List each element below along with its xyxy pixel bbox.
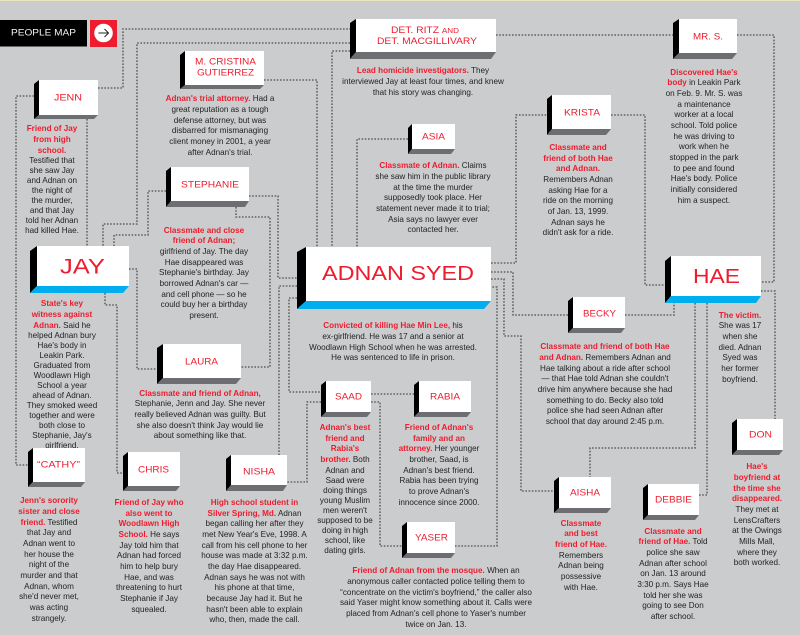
description: Mr. S.: body in Leakin Park [667,78,741,87]
description: Jenn: school. [38,146,66,155]
description: M. Cristina Gutierrez: defense attorney, but was [174,116,266,125]
description: Nisha: began calling her after they [205,519,304,528]
description: Yaser: Friend of Adnan from the mosque. When an [352,566,520,575]
name box: Mr. S.: MR. S. [693,32,723,42]
name box: Yaser [402,522,455,558]
description: Mr. S.: he was driving to [674,132,734,141]
description: Chris: Stephanie if Jay [120,594,178,603]
description: Chris: Friend of Jay who [114,498,184,507]
description: Nisha: hasn't been able to explain [206,605,303,614]
description: Rabia: to prove Adnan's [409,487,469,496]
description: Mr. S.: a maintenance [677,100,731,109]
description: Laura: she also doesn't think Jay would lie [137,421,263,430]
description: Mr. S.: worker at a local [674,110,734,119]
description: Stephanie: girlfriend of Jay. The day [160,247,248,256]
description: Saad: Saad were [326,476,364,485]
description: Asia: supposedly took place. Her [384,193,482,202]
description: Chris: also went to [126,509,172,518]
description: Krista: friend of both Hae [543,154,613,163]
description: Krista: Adnan says he [551,218,605,227]
description: Krista: and Adnan. [556,164,600,173]
description: Laura: really believed Adnan was guilty. But [134,410,266,419]
description: Hae: The victim. [719,311,761,320]
description: Don: Mills Mall, [739,537,775,546]
description: Hae: her former [721,364,759,373]
name box: Don: DON [749,430,772,440]
description: Don [732,462,782,567]
description: detectives: that his story was changing. [373,88,473,97]
description: Mr. S.: school. Told police [671,121,737,130]
description: Adnan Syed: Woodlawn High School when he was arrested. [309,343,477,352]
description: Saad: supposed to be [317,516,373,525]
name box: Yaser: YASER [415,532,448,544]
description: Rabia: brother, Saad, is [409,455,469,464]
description: Jay: Leakin Park. [39,351,85,360]
name box: Krista [547,95,611,135]
description: Saad: Adnan's best [320,423,370,432]
name box: Cathy [28,448,85,487]
description: Rabia: attorney. Her younger [399,444,479,453]
description: Rabia: innocence since 2000. [399,498,479,507]
description: Saad: dating girls. [324,546,366,555]
description: M. Cristina Gutierrez: disbarred for mismanaging [172,126,268,135]
name box: Adnan Syed [297,247,491,309]
description: Mr. S.: Discovered Hae's [670,68,738,77]
description: Jenn: the murder, [31,196,73,205]
description: Hae: She was 17 [719,321,761,330]
description: Jay: Graduated from [34,361,90,370]
description: M. Cristina Gutierrez: client money in 2001, a year [169,137,271,146]
description: Asia: Asia says no lawyer ever [388,215,478,224]
description: Becky: something to do. Becky also told [547,396,663,405]
description: Chris: Woodlawn High [119,519,179,528]
description: Aisha [555,519,607,592]
top edge strip [0,0,800,1]
description: Don: disappeared. [732,494,782,503]
description: Asia [375,161,491,234]
name box: Asia: ASIA [422,132,446,142]
description: Mr. S.: on Feb. 9. Mr. S. was [666,89,742,98]
name box: Laura [157,344,241,384]
description: Jay: helped Adnan bury [28,331,96,340]
description: Laura [134,389,266,440]
description: Jay: State's key [41,299,83,308]
description: Krista: ride on the morning [543,196,613,205]
description: Nisha: met New Year's Eve, 1998. A [202,530,307,539]
name box: Cathy: “CATHY” [37,460,80,470]
description: M. Cristina Gutierrez: after Adnan's trial. [188,148,252,157]
description: Stephanie: present. [189,311,219,320]
description: Saad: friend and [325,434,365,443]
description: Chris [114,498,184,615]
description: Jay: Woodlawn High [34,371,90,380]
description: Laura: about something like that. [154,431,246,440]
description: Debbie: after school. [651,612,695,621]
name box: Jay [30,246,129,293]
description: Jay: both close to [39,421,85,430]
description: Nisha: house was made at 3:32 p.m. [201,551,308,560]
description: Yaser: “concentrate on the victim's boyfriend,” the caller also [340,588,532,597]
description: Cathy: murder and that [20,571,78,580]
description: Jay: School a year [37,381,87,390]
description: Krista: didn't ask for a ride. [543,228,613,237]
description: Yaser: said Yaser might know something about it. Calls were [340,598,532,607]
description: Aisha: and best [564,529,598,538]
description: Rabia [398,423,480,507]
description: Cathy: Adnan, whom [24,582,74,591]
description: Nisha [201,498,308,626]
description: Asia: at the time the murder [393,183,473,192]
name box: Hae: HAE [693,266,740,288]
description: Debbie: told her she was [643,591,703,600]
description: Saad: doing things [323,486,367,495]
name box: Saad [321,381,371,417]
description: Laura: Stephanie, Jenn and Jay. She never [135,399,265,408]
description: Jay: Adnan. Said he [33,321,91,330]
name box: Chris [123,452,180,491]
name box: Det. Ritz and Det. MacGillivary: DET. RITZ AND [391,25,460,36]
description: Adnan Syed [309,321,477,362]
name box: Nisha: NISHA [243,466,276,478]
name box: Nisha [226,455,287,491]
name box: Det. Ritz and Det. MacGillivary: DET. MACGILLIVARY [377,36,478,47]
description: Debbie: police she saw [646,548,700,557]
description: Nisha: High school student in [211,498,298,507]
description: Saad: doing in high [322,526,368,535]
description: Debbie [637,527,709,621]
description: Jenn: and that Jay [30,206,74,215]
name box: M. Cristina Gutierrez: GUTIERREZ [197,68,254,78]
description: Nisha: because Jay had it. But he [207,594,302,603]
description: Chris: him to help bury [120,562,178,571]
name box: Stephanie: STEPHANIE [181,180,239,190]
description: Cathy: her house the [24,550,74,559]
name box: Becky: BECKY [583,308,617,320]
icon: arrow button [90,20,117,47]
description: Asia: Classmate of Adnan. Claims [379,161,487,170]
description: Saad: Adnan and [325,466,365,475]
description: Becky: police she had seen Adnan after [547,406,663,415]
name box: Mr. S. [673,19,737,59]
description: Nisha: the day Hae disappeared. [208,562,301,571]
name box: Aisha: AISHA [570,488,601,498]
description: M. Cristina Gutierrez [166,94,274,157]
name box: Chris: CHRIS [138,464,169,476]
description: Becky: school that day around 2:45 p.m. [546,417,664,426]
description: Krista: of Jan. 13, 1999. [548,207,608,216]
description: Stephanie: Hae disappeared was [165,258,243,267]
name box: Rabia: RABIA [430,392,461,402]
description: Nisha: Silver Spring, Md. Adnan [208,509,301,518]
description: Aisha: with Hae. [564,583,598,592]
description: Cathy: Jenn's sorority [20,496,78,505]
description: Mr. S. [666,68,742,205]
name box: M. Cristina Gutierrez: M. CRISTINA [195,56,257,68]
description: Rabia: Rabia has been trying [399,476,479,485]
description: Debbie: Adnan after school [639,559,707,568]
name box: Adnan Syed: ADNAN SYED [322,263,474,285]
name box: Debbie: DEBBIE [655,494,692,506]
description: Saad: young Muslim [320,496,370,505]
name box: Jenn: JENN [54,92,82,103]
description: Stephanie: borrowed Adnan's car — [160,279,248,288]
description: Jenn: she saw Jay [30,166,74,175]
description: Becky: Classmate and friend of both Hae [540,342,670,351]
name box: Don [732,419,783,455]
description: Asia: contacted her. [407,225,459,234]
description: Aisha: Remembers [559,551,603,560]
description: Hae: when she [723,332,757,341]
description: Don: the time she [733,484,781,493]
description: Becky: — that Hae told Adnan she couldn't [541,374,669,383]
name box: Jay: JAY [60,256,105,278]
description: Jay: girlfriend. [45,441,79,450]
description: Yaser [340,566,532,629]
description: Cathy: sister and close [18,507,80,516]
description: Mr. S.: to pee and found [674,164,734,173]
name box: M. Cristina Gutierrez [180,51,264,89]
description: Yaser: twice on Jan. 13. [406,620,466,629]
description: Jenn: had killed Hae. [25,226,79,235]
description: Jay: ahead of Adnan. [32,391,92,400]
description: Cathy: night of the [29,560,69,569]
name box: Stephanie [166,167,249,207]
description: detectives: interviewed Jay at least four times, and knew [342,77,504,86]
description: Mr. S.: him a suspect. [678,196,730,205]
description: Stephanie: could buy her a birthday [161,300,247,309]
description: Mr. S.: Hae's body. Police [671,174,737,183]
name box: Debbie [643,484,699,520]
description: Stephanie: and cell phone — so he [161,290,247,299]
description: Jay: Hae's body in [38,341,86,350]
description: Hae: Syed was [722,353,758,362]
description: Jenn: Testified that [29,156,75,165]
description: Don: They met at [736,505,778,514]
name box: Det. Ritz and Det. MacGillivary [350,19,496,59]
description: Nisha: his phone at that time, [215,583,294,592]
description: Adnan Syed: He was sentenced to life in prison. [331,353,455,362]
description: Debbie: going to see Don [642,601,704,610]
name box: Saad: SAAD [335,392,362,402]
description: Hae [718,311,761,384]
description: Stephanie: Stephanie's birthday. Jay [159,268,249,277]
description: Debbie: 3:30 p.m. Says Hae [637,580,709,589]
description: detectives [342,66,504,97]
description: Cathy: friend. Testified [21,518,77,527]
description: Chris: School. He says [119,530,179,539]
description: Jenn: and Adnan on [27,176,77,185]
description: Cathy: she'd never met, [19,592,79,601]
description: Cathy [18,496,80,623]
description: Hae: died. Adnan [719,343,761,352]
description: Becky: Hae talking about a ride after school [540,364,670,373]
description: Aisha: Adnan being [558,561,604,570]
description: Aisha: possessive [561,572,601,581]
description: Chris: threatening to hurt [116,583,182,592]
description: Saad: school, like [325,536,365,545]
description: Jenn: told her Adnan [26,216,78,225]
description: Chris: Adnan had forced [117,551,181,560]
description: Cathy: that Jay and [27,528,71,537]
description: Jay: Stephanie, Jay's [32,431,92,440]
description: Aisha: Classmate [561,519,601,528]
description: Krista: Classmate and [549,143,607,152]
description: Laura: Classmate and friend of Adnan, [139,389,261,398]
description: Stephanie: friend of Adnan; [173,236,235,245]
description: Saad: men weren't [323,506,367,515]
description: Cathy: Adnan went to [23,539,75,548]
name box: Aisha [554,477,611,513]
description: Rabia: Adnan's best friend. [403,466,475,475]
description: Asia: statement never made it to trial; [376,204,490,213]
description: M. Cristina Gutierrez: Adnan's trial attorney. Had a [166,94,274,103]
description: Jenn: Friend of Jay [27,124,77,133]
description: Saad: brother. Both [320,455,370,464]
banner: people map [0,20,87,46]
description: Don: boyfriend at [734,473,780,482]
name box: Jenn [34,80,98,119]
description: Nisha: who, then, made the call. [209,615,300,624]
description: Mr. S.: work when he [679,142,729,151]
description: Krista: asking Hae for a [548,186,608,195]
description: Debbie: on Jan. 13 around [640,569,706,578]
description: Becky: and Adnan. Remembers Adnan and [539,353,671,362]
description: Don: at the Owings [732,526,782,535]
description: Adnan Syed: Convicted of killing Hae Min Lee, his [323,321,463,330]
description: Don: LensCrafters [734,516,780,525]
description: Chris: squealed. [131,605,167,614]
description: Jay: together and were [29,411,95,420]
description: Yaser: anonymous caller contacted police telling them to [347,577,525,586]
description: Jay [26,299,97,450]
description: Debbie: friend of Hae. Told [639,537,707,546]
description: Mr. S.: initially considered [671,185,737,194]
description: Cathy: strangely. [32,614,66,623]
description: Hae: boyfriend. [722,375,758,384]
description: Don: both worked. [734,558,780,567]
name box: Becky [568,297,625,333]
description: Adnan Syed: ex-girlfriend. He was 17 and a senior at [322,332,464,341]
description: Stephanie [159,226,249,320]
description: Cathy: was acting [30,603,68,612]
description: Mr. S.: stopped in the park [669,153,739,162]
description: Jay: They smoked weed [27,401,97,410]
description: detectives: Lead homicide investigators. They [357,66,489,75]
description: Jay: witness against [32,310,92,319]
description: Saad [317,423,373,555]
description: Yaser: placed from Adnan's cell phone to Yaser's number [346,609,526,618]
description: Saad: Rabia's [331,444,359,453]
description: Nisha: call from his cell phone to her [202,541,307,550]
name box: Hae [665,256,761,303]
description: Asia: she saw him in the public library [375,172,491,181]
name box: Krista: KRISTA [564,108,601,118]
description: Rabia: Friend of Adnan's [405,423,473,432]
description: Debbie: Classmate and [644,527,702,536]
banner: people map: PEOPLE MAP [11,28,76,38]
description: Chris: Jay told him that [119,541,179,550]
name box: Asia [408,124,455,154]
description: Becky [538,342,672,426]
description: Jenn: from high [33,135,71,144]
description: Aisha: friend of Hae. [555,540,607,549]
description: Jenn: the night of [32,186,72,195]
description: Becky: drive him anywhere because she had [538,385,672,394]
description: Don: where they [737,548,777,557]
description: Chris: Hae, and was [124,573,174,582]
name box: Laura: LAURA [185,356,219,368]
description: Stephanie: Classmate and close [164,226,244,235]
description: M. Cristina Gutierrez: great reputation as a tough [171,105,269,114]
description: Krista: Remembers Adnan [543,175,613,184]
description: Jenn [25,124,79,235]
name box: Rabia [414,381,471,417]
description: Krista [543,143,613,237]
description: Nisha: Adnan says he was not with [204,573,305,582]
description: Don: Hae's [746,462,768,471]
description: Rabia: family and an [413,434,465,443]
